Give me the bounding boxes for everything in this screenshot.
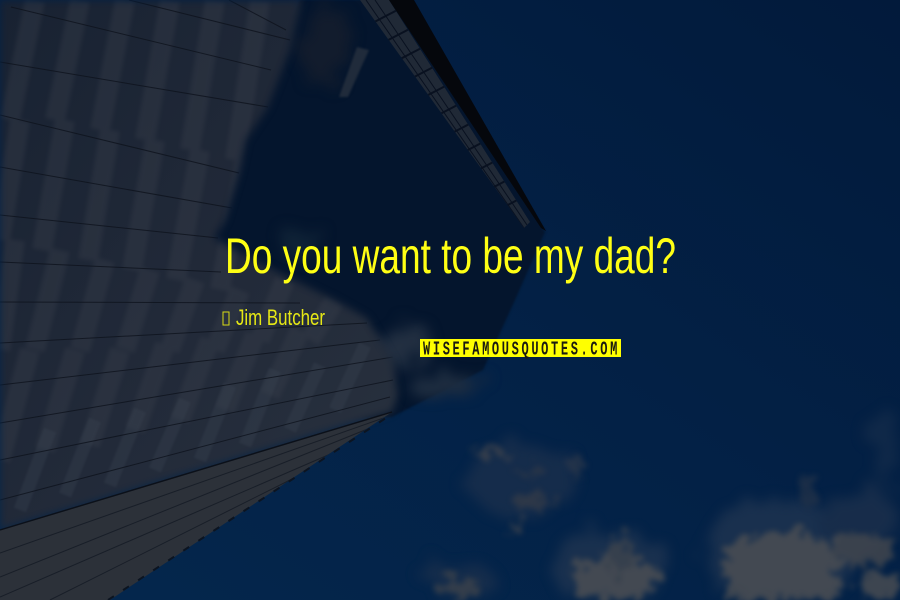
building: dark reflective side <box>200 0 545 420</box>
author attribution <box>223 305 325 330</box>
cloud haze <box>424 410 900 600</box>
building: lit facade <box>0 0 420 530</box>
quote text: Do you want to be my dad? <box>225 228 676 284</box>
roof mesh band <box>360 0 530 228</box>
watermark badge: WISEFAMOUSQUOTES.COM <box>423 339 620 360</box>
reflection haze on the dark side <box>280 3 481 397</box>
roof beam <box>389 0 546 231</box>
facade floor lines <box>0 0 393 500</box>
clouds <box>438 446 900 600</box>
author name: Jim Butcher <box>236 305 325 330</box>
facade window bands <box>2 2 266 458</box>
building: lower light strip <box>0 400 400 600</box>
strip lower notched edge <box>108 414 392 600</box>
icon: missing glyph box <box>223 312 229 325</box>
strip heavy edge line <box>0 412 392 530</box>
bright patch on glass <box>339 47 369 97</box>
